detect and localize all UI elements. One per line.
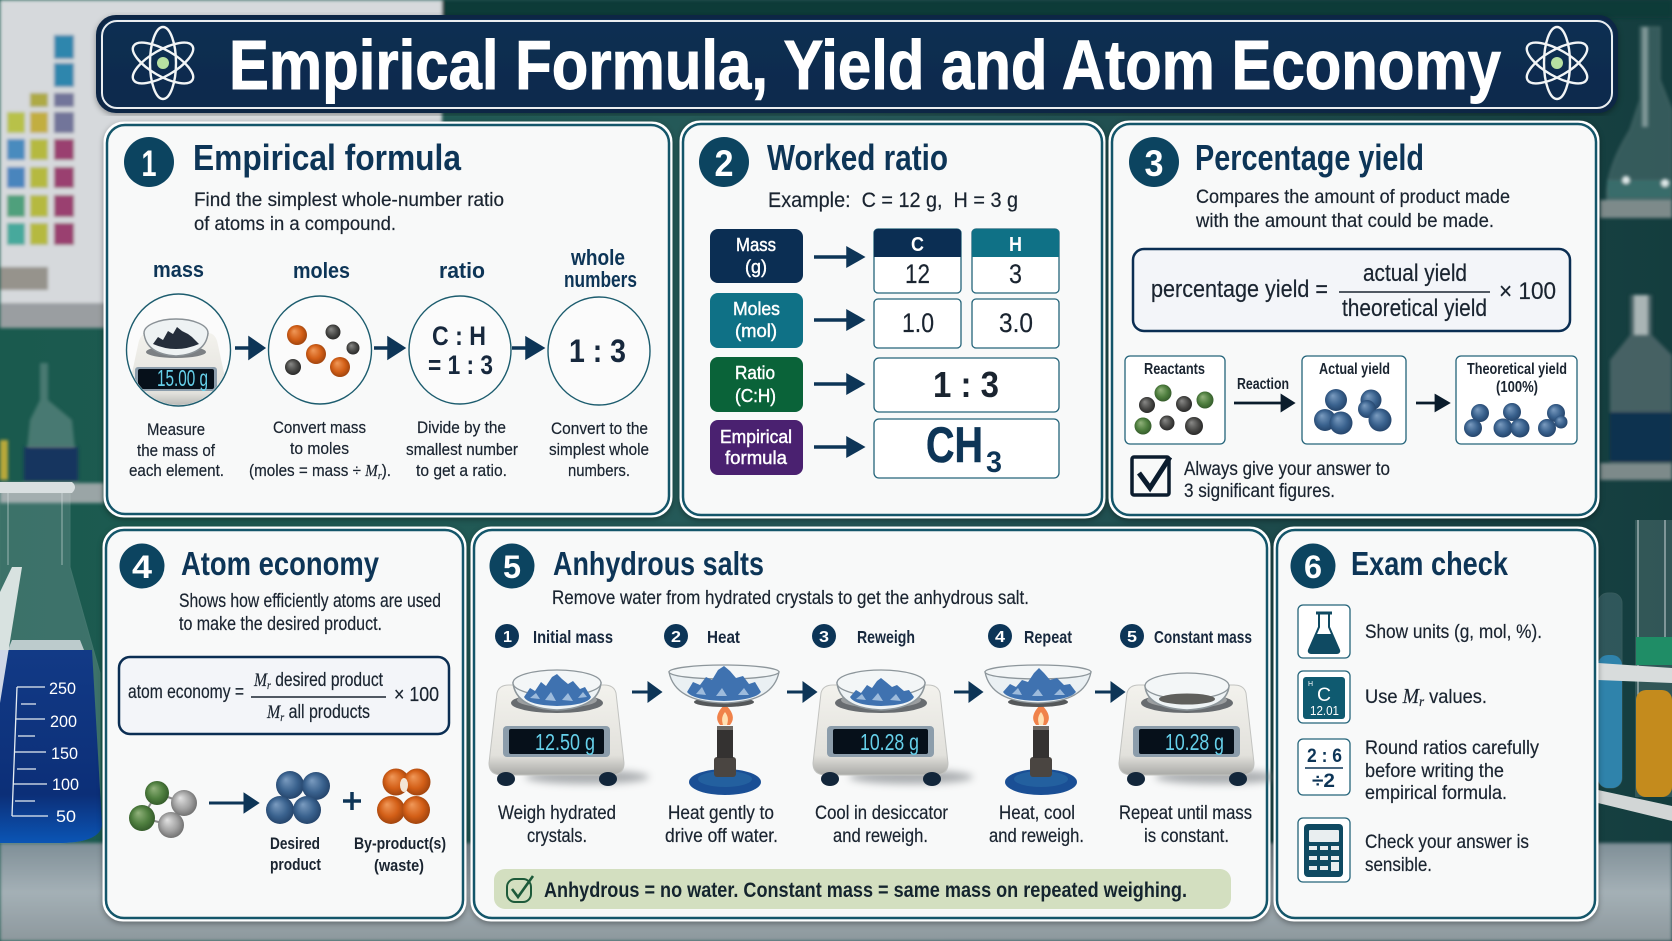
tip: rounding: Round ratios carefully [1365,737,1539,759]
intro text: Find the simplest whole-number ratio [194,189,504,211]
step: mass [124,257,232,480]
intro text: with the amount that could be made. [1195,210,1494,232]
box: actual yield: Actual yield [1319,361,1390,378]
step: moles: r [378,470,382,482]
note: Always give your answer to [1184,459,1390,480]
icon: carbon element tile: H [1308,681,1313,688]
arrow [374,339,403,357]
test tubes and rack [1598,593,1622,788]
tip: rounding [1365,737,1539,804]
step: whole numbers [548,245,650,480]
moles values: 1.0 [902,308,934,338]
row: ratio [710,357,803,412]
heading: Percentage yield [1195,137,1424,178]
formula box: actual yield [1363,260,1467,287]
step: moles: ). [382,461,391,480]
box: theoretical yield: Theoretical yield [1467,361,1567,378]
row: mass: Mass [736,234,776,255]
step: moles: moles [293,258,350,283]
arrow: reaction: Reaction [1237,376,1289,393]
panel frame [1275,528,1597,920]
step: ratio: Divide by the [417,418,506,437]
box: reactants: Reactants [1144,361,1205,378]
arrow: reaction [1234,376,1293,410]
formula box: M [266,702,281,723]
step 1: initial mass: Weigh hydrated [498,803,616,824]
H column: H [1009,234,1022,256]
step 2: heat [664,624,779,847]
step: mass: each element. [129,461,224,480]
C column: 12 [905,259,930,289]
formula box [119,657,449,734]
step 2: heat: drive off water. [665,826,778,847]
step 5: constant mass [1119,624,1279,847]
heading: Anhydrous salts [553,545,764,582]
heading: Atom economy [181,545,380,582]
step 4: repeat: Repeat [1024,627,1072,647]
step: whole numbers: Convert to the [551,419,648,438]
icon: ratio: 2 : 6 [1307,746,1342,767]
row: mass [710,229,803,283]
step: ratio: to get a ratio. [416,461,507,480]
icon: flask [1298,605,1350,658]
step: mass: Measure [147,420,205,439]
formula box: × 100 [1499,278,1556,305]
panel: 1 empirical formula [105,123,671,516]
formula box: percentage yield = [1151,276,1328,303]
formula CH3: 3 [986,446,1002,479]
desired product: Desired [270,834,320,853]
badge 5: 5 [503,549,521,585]
step 3: reweigh [812,624,973,847]
intro text: of atoms in a compound. [194,213,396,235]
intro text [194,189,504,235]
panel: 4 atom economy [104,528,465,920]
box: actual yield [1302,356,1406,444]
step 1: initial mass: 1 [503,629,512,646]
arrow [235,339,263,357]
step: ratio: C : H [432,321,486,351]
callout bar [494,869,1231,909]
heading: Worked ratio [767,137,948,178]
step 2: heat: Heat [707,627,740,647]
box: theoretical yield [1456,356,1577,444]
intro text: to make the desired product. [179,613,382,635]
title text: Empirical Formula, Yield and Atom Economy [229,26,1501,104]
formula box: × 100 [394,684,439,706]
badge 5 [490,544,534,588]
arrow [814,439,862,455]
step: whole numbers: 1 : 3 [569,333,626,369]
heading: Exam check [1351,545,1509,582]
icon: ratio [1298,739,1350,795]
formula box: atom economy = [128,682,244,703]
tip: sensible [1365,831,1529,876]
badge 2 [699,137,749,187]
icon: ratio: ÷2 [1312,771,1335,792]
by-products: By-product(s) [354,834,446,853]
step 4: repeat: Heat, cool [999,803,1075,824]
intro text: Compares the amount of product made [1196,186,1510,208]
intro text [179,590,441,635]
step 3: reweigh: and reweigh. [833,826,928,847]
arrow [632,684,660,700]
badge 2: 2 [714,143,734,184]
tip: rounding: before writing the [1365,760,1504,782]
badge 3 [1129,137,1179,187]
step: moles: to moles [290,439,349,458]
step: whole numbers: simplest whole [549,440,649,459]
step 4: repeat: 4 [995,629,1005,646]
reactant molecules [129,781,197,838]
background: blurred laboratory scene: 250 [49,679,76,698]
heading: Empirical formula [193,137,462,178]
tip: Mr values: r [1419,695,1425,710]
arrow [814,312,862,328]
row: mass: (g) [745,256,767,277]
panel frame [681,122,1104,517]
plus sign [343,792,361,810]
step: ratio [406,258,518,480]
panel frame [105,123,671,516]
step 1: initial mass [489,624,649,847]
step: moles: (moles = mass ÷ M [249,461,379,480]
icon: atom right [1521,27,1593,99]
formula box: r [280,710,284,724]
step 3: reweigh: 10.28 g [860,729,919,755]
tip: rounding: empirical formula. [1365,782,1507,804]
step 3: reweigh: Cool in desiccator [815,803,949,824]
badge 6: 6 [1304,549,1322,585]
step: whole numbers: whole [570,245,625,270]
formula box: all products [284,702,370,723]
C column: C [911,234,924,256]
panel: 6 exam check [1275,528,1597,920]
step 3: reweigh: Reweigh [857,627,915,647]
step: mass: 15.00 g [157,365,208,391]
step 1: initial mass: crystals. [527,826,587,847]
panel: 3 percentage yield [1110,122,1598,517]
formula box: theoretical yield [1342,295,1487,322]
badge 6 [1290,544,1336,588]
background: blurred laboratory scene: 150 [51,744,78,763]
arrow [209,795,257,811]
moles values: 3.0 [999,308,1033,338]
panel: 5 anhydrous salts [472,528,1279,920]
H column [972,229,1059,293]
badge 4 [120,544,164,588]
step 5: constant mass: Constant mass [1154,627,1252,647]
ratio value [874,358,1059,412]
step 5: constant mass: is constant. [1144,826,1229,847]
desired product: product [270,855,321,874]
arrow [512,339,542,357]
step 4: repeat [985,624,1091,847]
intro text [1195,186,1510,232]
step 5: constant mass: Repeat until mass [1119,803,1252,824]
intro text: Remove water from hydrated crystals to get the anhydrous salt. [552,587,1029,609]
by-products: (waste) [374,856,424,875]
step: ratio: = 1 : 3 [428,350,493,380]
icon: checkbox [1132,457,1170,495]
example line: Example: C = 12 g, H = 3 g [768,189,1018,212]
title banner [98,17,1616,111]
arrow [814,249,862,265]
row: ratio: Ratio [735,362,775,383]
H column: 3 [1009,259,1022,289]
flask body [0,493,100,843]
step: mass: the mass of [137,441,215,460]
step 5: constant mass: 10.28 g [1165,729,1224,755]
row: moles: Moles [733,298,780,319]
step 2: heat: Heat gently to [668,803,774,824]
step: moles: Convert mass [273,418,366,437]
step: ratio: ratio [439,258,485,283]
box: reactants [1125,356,1225,444]
step 1: initial mass: 12.50 g [535,729,595,755]
desired product [266,771,330,874]
step 2: heat: 2 [671,629,681,646]
step 5: constant mass: 5 [1127,629,1137,646]
tip: units: Show units (g, mol, %). [1365,621,1542,643]
background: blurred laboratory scene: 50 [56,807,76,826]
icon: atom left [127,27,199,99]
panel frame [1110,122,1598,517]
row: moles: (mol) [735,320,777,341]
row: empirical formula: formula [725,447,788,468]
moles values [874,299,1059,348]
formula box: r [267,678,271,692]
banner frame [98,17,1616,111]
badge 1: 1 [142,143,156,184]
arrow [1416,396,1448,410]
callout bar: Anhydrous = no water. Constant mass = same mass on repeated weighing. [544,879,1187,902]
formula box: desired product [271,670,384,691]
intro text: Shows how efficiently atoms are used [179,590,441,612]
formula CH3: CH [926,417,983,473]
step 4: repeat: and reweigh. [989,826,1084,847]
background: blurred laboratory scene: 200 [50,712,77,731]
tip: sensible: Check your answer is [1365,831,1529,853]
formula CH3 [874,417,1059,479]
arrow [814,376,862,392]
row: empirical formula: Empirical [720,426,792,447]
arrow [787,684,815,700]
panel: 2 worked ratio [681,122,1104,517]
note [1184,459,1390,502]
row: ratio: (C:H) [735,385,776,406]
arrow [954,684,981,700]
icon: carbon element tile: 12.01 [1310,704,1339,718]
tip: Mr values: values. [1424,686,1487,708]
C column [874,229,961,293]
formula box: M [253,670,268,691]
step 3: reweigh: 3 [819,629,829,646]
step: moles [249,258,391,482]
icon: carbon element tile: C [1317,685,1331,706]
ratio value: 1 : 3 [933,364,999,405]
step: mass: mass [153,257,204,282]
formula box [1133,249,1570,331]
box: theoretical yield: (100%) [1496,379,1538,396]
badge 4: 4 [132,549,152,585]
row: moles [710,293,803,348]
tip: Mr values: Use M [1365,684,1420,708]
note: 3 significant figures. [1184,481,1335,502]
by-products [354,768,446,875]
step 1: initial mass: Initial mass [533,627,613,647]
panel frame [104,528,465,920]
icon: carbon element tile [1298,671,1350,723]
tip: sensible: sensible. [1365,854,1432,876]
badge 3: 3 [1144,143,1164,184]
row: empirical formula [710,420,803,475]
step: ratio: smallest number [406,440,518,459]
badge 1 [124,137,174,187]
arrow [1095,684,1123,700]
panel frame [472,528,1269,920]
background: blurred laboratory scene: 100 [52,775,79,794]
icon: calculator [1298,818,1350,882]
step: whole numbers: numbers [564,267,637,292]
step: whole numbers: numbers. [568,461,630,480]
